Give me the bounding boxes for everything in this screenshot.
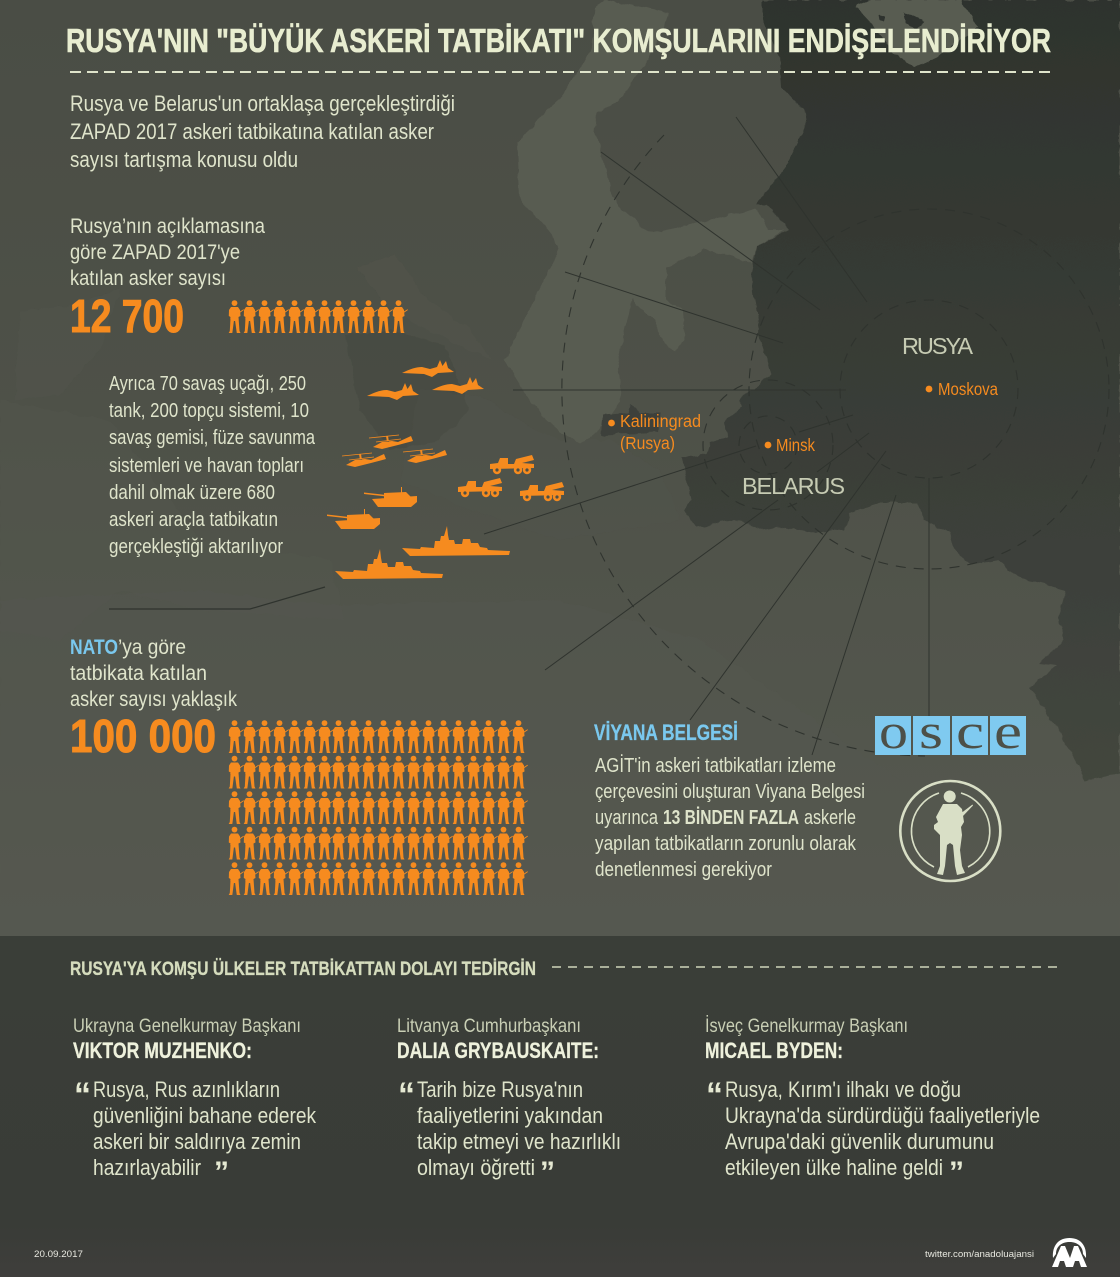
quote: Viktor Muzhenko: Ukrayna Genelkurmay Başkanı <box>73 1016 301 1037</box>
equipment text: gerçekleştiği aktarılıyor <box>109 536 283 558</box>
OSCE logo <box>875 703 1026 759</box>
quote: Micael Byden: İsveç Genelkurmay Başkanı <box>705 1016 908 1037</box>
Vienna document text: AGİT'in askeri tatbikatları izleme <box>595 754 836 777</box>
Vienna document text <box>595 754 865 881</box>
equipment text: Ayrıca 70 savaş uçağı, 250 <box>109 373 306 395</box>
quote: Viktor Muzhenko: VIKTOR MUZHENKO: <box>73 1038 252 1063</box>
map labels: BELARUS <box>742 473 845 499</box>
Vienna document text: 13 BİNDEN FAZLA <box>663 806 799 829</box>
Russia's figure label: Rusya’nın açıklamasına <box>70 215 265 238</box>
Vienna document text: uyarınca <box>595 807 659 829</box>
quote: Micael Byden: “ <box>706 1076 723 1114</box>
quote: Micael Byden: etkileyen ülke haline geldi <box>725 1155 943 1180</box>
intro text: ZAPAD 2017 askeri tatbikatına katılan asker <box>70 119 434 144</box>
equipment text: tank, 200 topçu sistemi, 10 <box>109 400 309 422</box>
quote: Dalia Grybauskaite: takip etmeyi ve hazırlıklı <box>417 1129 621 1154</box>
Russia and Belarus dark land <box>681 0 1120 780</box>
quote: Micael Byden: Ukrayna'da sürdürdüğü faaliyetleriyle <box>725 1103 1040 1128</box>
icon: soldier in circle <box>900 781 1000 881</box>
NATO figure label: tatbikata katılan <box>70 662 207 685</box>
Kaliningrad <box>601 403 660 435</box>
Vienna document text: askerle <box>804 807 856 829</box>
quote: Micael Byden: ” <box>949 1156 964 1189</box>
map labels: Minsk <box>776 435 815 455</box>
OSCE logo: o <box>879 703 908 759</box>
NATO figure label: NATO <box>70 636 118 659</box>
equipment text <box>109 373 316 558</box>
Vienna document text: yapılan tatbikatların zorunlu olarak <box>595 833 857 855</box>
footer date: 20.09.2017 <box>34 1249 83 1260</box>
sea: Gulf of Bothnia and Baltic <box>505 0 785 443</box>
intro text: Rusya ve Belarus'un ortaklaşa gerçekleştirdiği <box>70 91 455 116</box>
quote: Viktor Muzhenko: askeri bir saldırıya zemin <box>93 1129 301 1154</box>
quote: Viktor Muzhenko: güvenliğini bahane ederek <box>93 1103 317 1128</box>
Vienna document text: çerçevesini oluşturan Viyana Belgesi <box>595 781 865 803</box>
icons: military equipment <box>327 360 564 579</box>
Russia's figure label: katılan asker sayısı <box>70 267 226 290</box>
equipment text: dahil olmak üzere 680 <box>109 482 275 504</box>
Russia's figure label <box>70 215 265 290</box>
quote: Viktor Muzhenko <box>73 1016 317 1189</box>
map labels: RUSYA <box>902 333 973 359</box>
Vienna document heading: VİYANA BELGESİ <box>594 720 738 745</box>
quote: Dalia Grybauskaite: Litvanya Cumhurbaşkanı <box>397 1016 581 1037</box>
quote: Dalia Grybauskaite: ” <box>540 1156 555 1189</box>
Vienna document text: denetlenmesi gerekiyor <box>595 859 772 881</box>
quote: Viktor Muzhenko: Rusya, Rus azınlıkların <box>93 1077 280 1102</box>
quote: Viktor Muzhenko: “ <box>74 1076 91 1114</box>
OSCE logo: c <box>956 703 984 759</box>
equipment text: sistemleri ve havan topları <box>109 455 304 477</box>
NATO figure label <box>70 636 237 711</box>
intro text: sayısı tartışma konusu oldu <box>70 147 298 172</box>
quote: Dalia Grybauskaite <box>397 1016 621 1189</box>
Russia's figure label: göre ZAPAD 2017'ye <box>70 241 240 264</box>
NATO figure label: ’ya göre <box>118 636 186 659</box>
map labels: (Rusya) <box>620 433 675 453</box>
map lines and range circles <box>109 117 1109 756</box>
footer twitter handle: twitter.com/anadoluajansi <box>925 1249 1034 1260</box>
quote: Micael Byden <box>705 1016 1040 1189</box>
quote: Dalia Grybauskaite: “ <box>398 1076 415 1114</box>
number: 12 700: 12 700 <box>70 290 184 342</box>
map labels <box>608 333 998 499</box>
number: 100 000: 100 000 <box>70 710 216 762</box>
quote: Micael Byden: Rusya, Kırım'ı ilhakı ve doğu <box>725 1077 961 1102</box>
NATO figure label: asker sayısı yaklaşık <box>70 688 237 711</box>
panel heading: RUSYA'YA KOMŞU ÜLKELER TATBİKATTAN DOLAYI TEDİRGİN <box>70 959 536 980</box>
quote: Micael Byden: MICAEL BYDEN: <box>705 1038 843 1063</box>
bottom panel <box>0 936 1120 1277</box>
map labels: Kaliningrad <box>620 411 701 431</box>
map background <box>0 0 1120 940</box>
equipment text: askeri araçla tatbikatın <box>109 509 278 531</box>
intro text <box>70 91 455 172</box>
pictogram: 12 soldiers <box>229 300 408 333</box>
White Sea <box>856 0 978 68</box>
map labels: Moskova <box>938 379 998 399</box>
quote: Dalia Grybauskaite: Tarih bize Rusya'nın <box>417 1077 583 1102</box>
equipment text: savaş gemisi, füze savunma <box>109 427 316 449</box>
quote: Dalia Grybauskaite: DALIA GRYBAUSKAITE: <box>397 1038 599 1063</box>
quote: Viktor Muzhenko: hazırlayabilir <box>93 1155 201 1180</box>
quote: Micael Byden: Avrupa'daki güvenlik durumunu <box>725 1129 994 1154</box>
OSCE logo: e <box>994 703 1022 759</box>
OSCE logo: s <box>919 703 943 759</box>
icon: AA logo <box>1052 1238 1087 1267</box>
quote: Dalia Grybauskaite: olmayı öğretti <box>417 1155 535 1180</box>
pictogram: 100 soldiers <box>229 720 528 895</box>
quote: Viktor Muzhenko: ” <box>214 1156 229 1189</box>
quote: Dalia Grybauskaite: faaliyetlerini yakından <box>417 1103 603 1128</box>
